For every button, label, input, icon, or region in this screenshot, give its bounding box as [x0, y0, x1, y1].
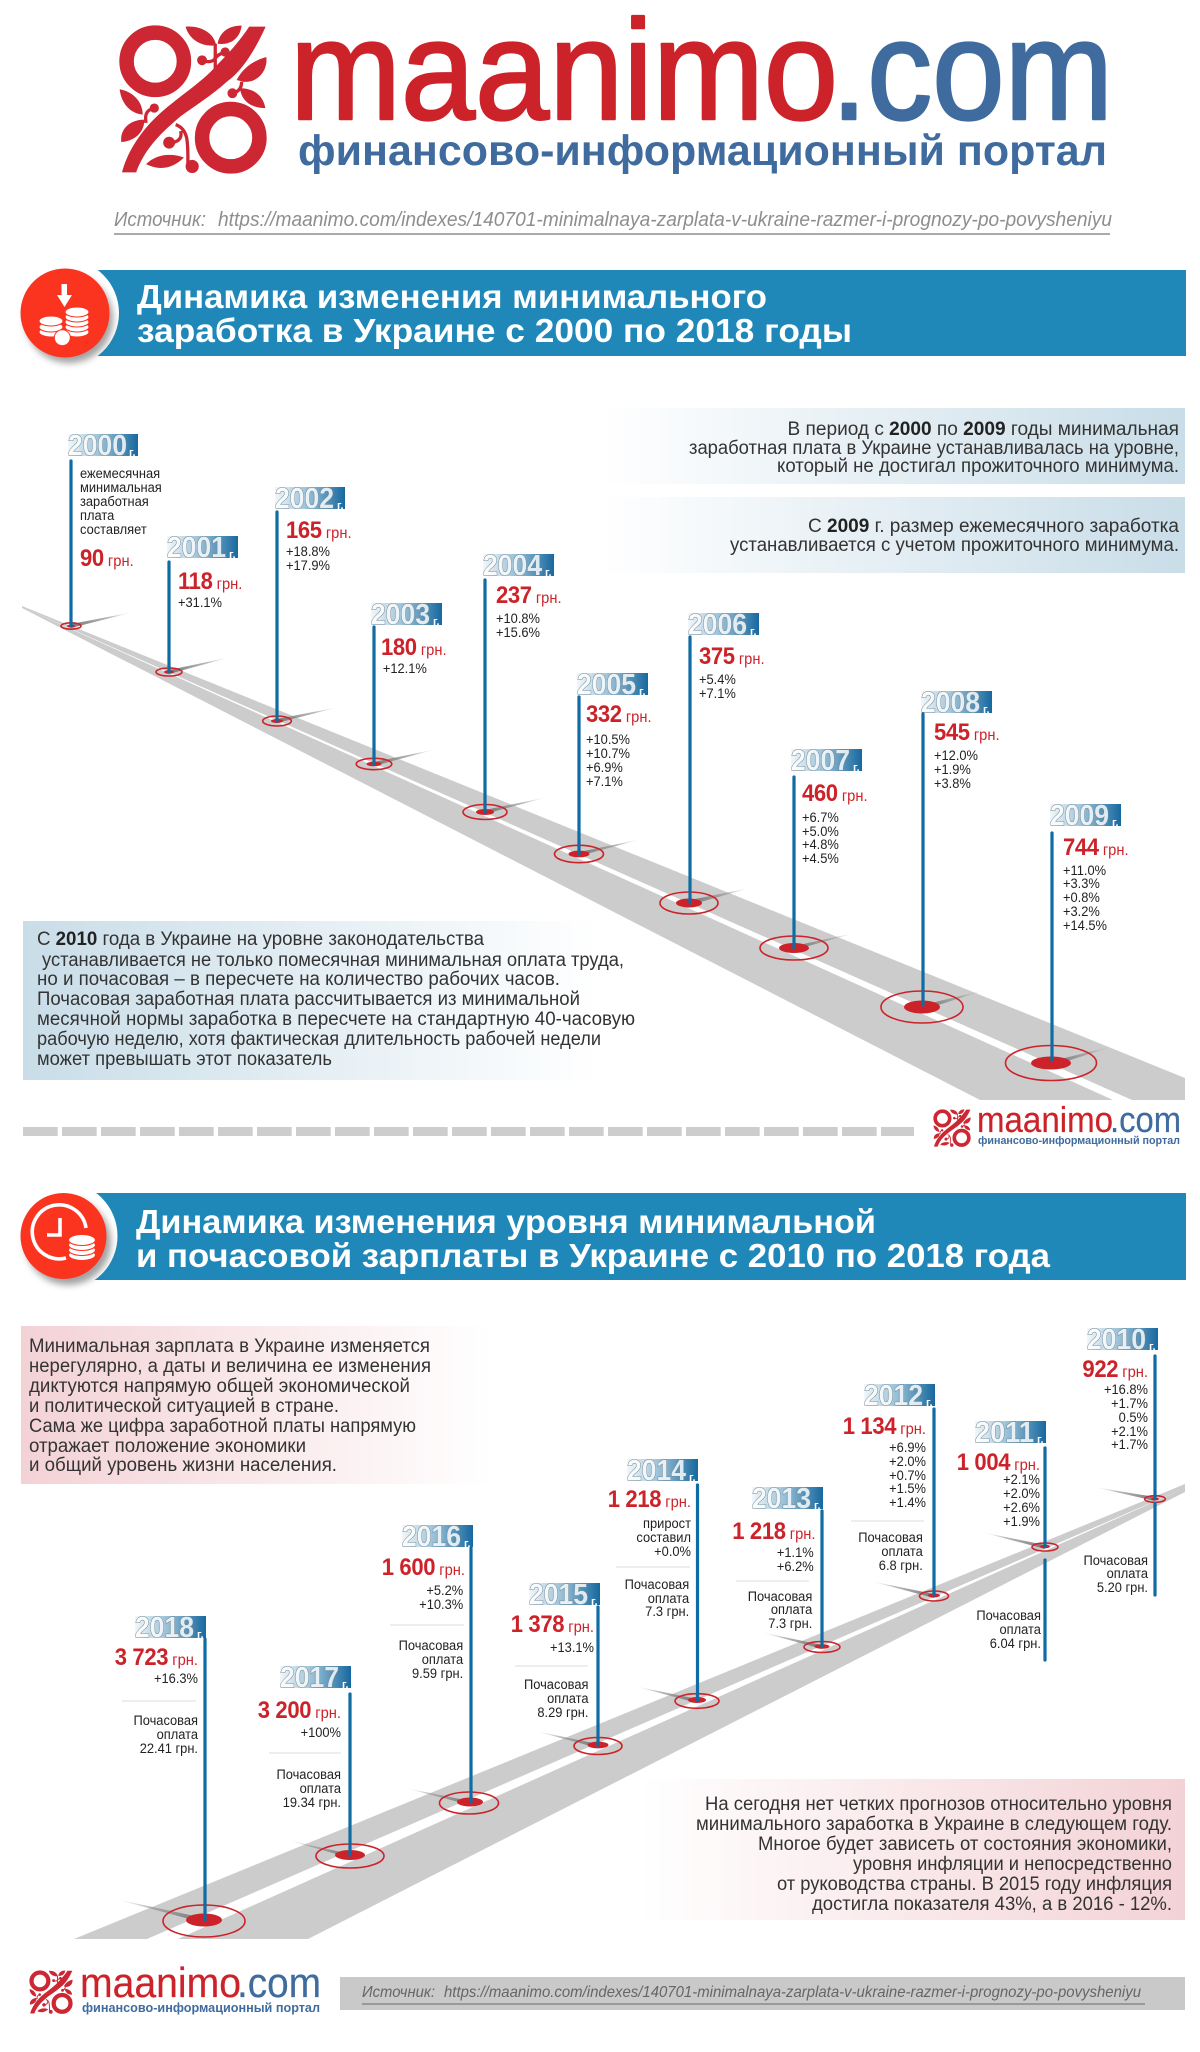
milestone 2018: +16.3%: [154, 1671, 198, 1686]
milestone 2008: 2008: [921, 687, 980, 719]
milestone 2017: оплата: [300, 1781, 341, 1796]
milestone 2013: оплата: [771, 1602, 813, 1617]
milestone 2007: 460 грн.: [802, 779, 868, 806]
source line: https://maanimo.com/indexes/140701-minimalnaya-zarplata-v-ukraine-razmer-i-prognozy-po-povysheniyu: [218, 209, 1112, 231]
milestone 2018: 3 723 грн.: [115, 1643, 198, 1670]
milestone 2016: 9.59 грн.: [412, 1666, 463, 1681]
milestone 2010: 5.20 грн.: [1097, 1580, 1148, 1595]
milestone 2015: 8.29 грн.: [537, 1705, 588, 1720]
milestone 2016: г.: [464, 1538, 471, 1550]
logo emblem: [120, 26, 267, 173]
milestone 2014: 2014: [627, 1455, 686, 1487]
milestone 2011: +1.9%: [1003, 1514, 1040, 1529]
milestone 2011: Почасовая: [976, 1608, 1041, 1623]
milestone 2014: +0.0%: [654, 1544, 691, 1559]
icon: coins with down arrow: [39, 284, 89, 346]
milestone 2017: +100%: [301, 1725, 341, 1740]
milestone 2003: г.: [433, 616, 440, 628]
milestone 2004: г.: [545, 567, 552, 579]
milestone 2010: +2.1%: [1111, 1424, 1148, 1439]
small logo right: [933, 1099, 1181, 1147]
milestone 2016: +5.2%: [426, 1583, 463, 1598]
milestone 2010: г.: [1149, 1341, 1156, 1353]
milestone 2004: 2004: [483, 550, 542, 582]
milestone 2000: плата: [80, 508, 115, 523]
milestone 2001: +31.1%: [178, 595, 222, 610]
milestone 2005: +7.1%: [586, 774, 623, 789]
milestone 2000: 2000: [68, 430, 127, 462]
milestone 2003: [356, 599, 447, 770]
callout: forecast: от руководства страны. В 2015 году инфляция: [777, 1874, 1172, 1895]
callout: since 2009: С 2009 г. размер ежемесячного заработка: [808, 516, 1179, 537]
milestone 2014: г.: [689, 1472, 696, 1484]
milestone 2012: [843, 1380, 948, 1601]
callout: since 2009: [600, 497, 1185, 573]
milestone 2012: +1.4%: [889, 1495, 926, 1510]
milestone 2008: +1.9%: [934, 762, 971, 777]
milestone 2012: +0.7%: [889, 1468, 926, 1483]
milestone 2002: 165 грн.: [286, 516, 352, 543]
milestone 2007: +5.0%: [802, 824, 839, 839]
milestone 2017: 19.34 грн.: [283, 1795, 341, 1810]
milestone 2001: [156, 532, 242, 676]
milestone 2000: [61, 430, 162, 629]
milestone 2007: г.: [853, 762, 860, 774]
milestone 2010: +16.8%: [1104, 1382, 1148, 1397]
heading text: заработка в Украине с 2000 по 2018 годы: [137, 312, 852, 349]
milestone 2005: [554, 669, 652, 863]
milestone 2010: оплата: [1107, 1566, 1148, 1581]
callout: forecast: уровня инфляции и непосредственно: [853, 1854, 1172, 1875]
milestone 2011: +2.1%: [1003, 1472, 1040, 1487]
callout: irregular changes: Сама же цифра заработной платы напрямую: [29, 1416, 416, 1437]
milestone 2015: +13.1%: [550, 1640, 594, 1655]
milestone 2014: прирост: [643, 1516, 691, 1531]
milestone 2000: 90 грн.: [80, 544, 134, 571]
milestone 2015: г.: [591, 1596, 598, 1608]
milestone 2013: 1 218 грн.: [732, 1517, 816, 1544]
milestone 2009: +3.3%: [1063, 876, 1100, 891]
milestone 2002: +18.8%: [286, 544, 330, 559]
milestone 2016: Почасовая: [399, 1638, 463, 1653]
milestone 2013: 2013: [752, 1483, 811, 1515]
milestone 2006: [660, 609, 765, 914]
milestone 2015: 1 378 грн.: [511, 1610, 594, 1637]
small logo left: [29, 1959, 321, 2015]
milestone 2011: +2.6%: [1003, 1500, 1040, 1515]
callout: forecast: На сегодня нет четких прогнозов относительно уровня: [705, 1794, 1172, 1815]
milestone 2016: +10.3%: [419, 1597, 463, 1612]
milestone 2008: +3.8%: [934, 776, 971, 791]
milestone 2015: Почасовая: [524, 1677, 588, 1692]
callout: 2010 hourly pay: [23, 921, 635, 1080]
milestone 2012: 2012: [864, 1380, 923, 1412]
road 2000-2009: [22, 606, 1185, 1100]
callout: irregular changes: диктуются напрямую общей экономической: [29, 1376, 410, 1397]
milestone 2007: +4.5%: [802, 851, 839, 866]
milestone 2010: [1082, 1324, 1165, 1595]
callout: 2010 hourly pay: но и почасовая – в пересчете на количество рабочих часов.: [37, 969, 560, 990]
milestone 2012: г.: [926, 1397, 933, 1409]
milestone 2009: +14.5%: [1063, 918, 1107, 933]
small logo left: .com: [237, 1959, 321, 2006]
milestone 2010: Почасовая: [1083, 1553, 1148, 1568]
small logo right: maanimo: [977, 1099, 1113, 1140]
callout: forecast: достигла показателя 43%, а в 2016 - 12%.: [812, 1894, 1172, 1915]
milestone 2009: +3.2%: [1063, 904, 1100, 919]
milestone 2001: 2001: [167, 532, 226, 564]
callout: 2000-2009: [600, 408, 1185, 484]
milestone 2015: [511, 1579, 622, 1754]
callout: forecast: [640, 1779, 1185, 1920]
milestone 2012: +2.0%: [889, 1454, 926, 1469]
road 2010-2018: [74, 1484, 1185, 1939]
milestone 2013: +6.2%: [777, 1559, 814, 1574]
icon: clock with coins: [32, 1205, 96, 1260]
milestone 2000: заработная: [80, 494, 149, 509]
milestone 2005: 332 грн.: [586, 700, 652, 727]
milestone 2013: [732, 1483, 840, 1652]
milestone 2014: составил: [636, 1530, 691, 1545]
milestone 2013: +1.1%: [777, 1545, 814, 1560]
milestone 2009: 2009: [1050, 800, 1109, 832]
milestone 2012: Почасовая: [858, 1530, 923, 1545]
milestone 2012: 6.8 грн.: [879, 1558, 923, 1573]
milestone 2011: 2011: [975, 1417, 1034, 1449]
milestone 2014: [608, 1455, 719, 1708]
milestone 2000: г.: [129, 447, 136, 459]
heading text: и почасовой зарплаты в Украине с 2010 по 2018 года: [136, 1237, 1051, 1274]
milestone 2002: 2002: [275, 483, 334, 515]
milestone 2008: [881, 687, 1000, 1023]
milestone 2006: 2006: [688, 609, 747, 641]
milestone 2001: 118 грн.: [178, 567, 242, 594]
milestone 2010: +1.7%: [1111, 1396, 1148, 1411]
milestone 2016: оплата: [422, 1652, 464, 1667]
milestone 2007: [760, 745, 868, 960]
milestone 2013: г.: [814, 1500, 821, 1512]
milestone 2009: г.: [1112, 817, 1119, 829]
milestone 2018: 2018: [135, 1612, 194, 1644]
milestone 2010: 922 грн.: [1082, 1355, 1148, 1382]
milestone 2016: 2016: [402, 1521, 461, 1553]
callout: forecast: Многое будет зависеть от состояния экономики,: [758, 1834, 1172, 1855]
milestone 2006: г.: [750, 626, 757, 638]
source line: Источник:: [114, 209, 206, 231]
milestone 2007: +4.8%: [802, 837, 839, 852]
milestone 2018: 22.41 грн.: [140, 1741, 198, 1756]
callout: irregular changes: Минимальная зарплата в Украине изменяется: [29, 1336, 430, 1357]
milestone 2015: 2015: [529, 1579, 588, 1611]
small logo right: финансово-информационный портал: [978, 1135, 1180, 1147]
milestone 2007: 2007: [791, 745, 850, 777]
milestone 2017: 3 200 грн.: [258, 1696, 341, 1723]
heading text: [136, 1203, 1051, 1274]
milestone 2006: 375 грн.: [699, 642, 765, 669]
milestone 2009: 744 грн.: [1063, 833, 1129, 860]
milestone 2004: +15.6%: [496, 625, 540, 640]
milestone 2010: 0.5%: [1119, 1410, 1148, 1425]
section 1 heading banner: [11, 259, 1186, 367]
heading text: [137, 278, 852, 349]
heading text: Динамика изменения минимального: [137, 278, 767, 315]
milestone 2011: +2.0%: [1003, 1486, 1040, 1501]
header logo: [120, 0, 1113, 175]
milestone 2018: [115, 1612, 245, 1937]
milestone 2004: [463, 550, 562, 820]
milestone 2004: 237 грн.: [496, 581, 562, 608]
small logo left: maanimo: [80, 1959, 241, 2006]
milestone 2008: 545 грн.: [934, 718, 1000, 745]
milestone 2002: [263, 483, 352, 726]
milestone 2018: г.: [197, 1629, 204, 1641]
milestone 2012: 1 134 грн.: [843, 1412, 926, 1439]
milestone 2018: оплата: [157, 1727, 198, 1742]
milestone 2003: 180 грн.: [381, 633, 447, 660]
milestone 2009: +11.0%: [1063, 863, 1106, 878]
milestone 2005: +10.7%: [586, 746, 630, 761]
milestone 2010: +1.7%: [1111, 1437, 1148, 1452]
milestone 2000: минимальная: [80, 480, 162, 495]
callout: 2000-2009: заработная плата в Украине устанавливалась на уровне,: [689, 438, 1179, 459]
milestone 2017: [258, 1662, 384, 1868]
milestone 2008: г.: [983, 704, 990, 716]
milestone 2011: оплата: [1000, 1622, 1041, 1637]
milestone 2014: 1 218 грн.: [608, 1485, 691, 1512]
milestone 2008: +12.0%: [934, 748, 978, 763]
callout: irregular changes: [21, 1326, 491, 1484]
callout: 2010 hourly pay: устанавливается не только помесячная минимальная оплата труда,: [42, 950, 624, 971]
milestone 2011: 6.04 грн.: [990, 1636, 1041, 1651]
source bar: Источник:: [362, 1984, 435, 2001]
milestone 2004: +10.8%: [496, 611, 540, 626]
milestone 2005: 2005: [577, 669, 636, 701]
milestone 2012: +1.5%: [889, 1481, 926, 1496]
milestone 2005: г.: [639, 686, 646, 698]
milestone 2011: 1 004 грн.: [957, 1448, 1040, 1475]
milestone 2011: [957, 1417, 1058, 1660]
source bar: https://maanimo.com/indexes/140701-minimalnaya-zarplata-v-ukraine-razmer-i-prognozy-po-povysheniyu: [444, 1984, 1141, 2001]
small logo right: .com: [1110, 1099, 1181, 1140]
section 2 heading banner: [10, 1182, 1186, 1290]
milestone 2014: оплата: [648, 1591, 690, 1606]
milestone 2002: г.: [337, 500, 344, 512]
milestone 2003: +12.1%: [383, 661, 427, 676]
milestone 2005: +10.5%: [586, 732, 630, 747]
milestone 2006: +5.4%: [699, 672, 736, 687]
callout: 2000-2009: В период с 2000 по 2009 годы минимальная: [788, 419, 1179, 440]
milestone 2016: [382, 1521, 498, 1814]
callout: 2010 hourly pay: рабочую неделю, хотя фактическая длительность рабочей недели: [37, 1029, 601, 1050]
milestone 2012: +6.9%: [889, 1440, 926, 1455]
milestone 2013: Почасовая: [748, 1589, 812, 1604]
milestone 2006: +7.1%: [699, 686, 736, 701]
callout: 2010 hourly pay: С 2010 года в Украине на уровне законодательства: [37, 929, 484, 950]
milestone 2013: 7.3 грн.: [768, 1616, 812, 1631]
milestone 2010: 2010: [1087, 1324, 1146, 1356]
callout: 2010 hourly pay: месячной нормы заработка в пересчете на стандартную 40-часовую: [37, 1009, 635, 1030]
milestone 2009: [1006, 800, 1129, 1080]
milestone 2017: 2017: [280, 1662, 339, 1694]
source bar: [340, 1977, 1185, 2010]
milestone 2011: г.: [1037, 1434, 1044, 1446]
milestone 2002: +17.9%: [286, 558, 330, 573]
logo tagline: финансово-информационный портал: [298, 127, 1107, 175]
callout: 2010 hourly pay: может превышать этот показатель: [37, 1049, 332, 1070]
callout: forecast: минимального заработка в Украине в следующем году.: [696, 1814, 1172, 1835]
callout: irregular changes: отражает положение экономики: [29, 1436, 306, 1457]
callout: 2000-2009: который не достигал прожиточного минимума.: [777, 456, 1179, 477]
milestone 2017: Почасовая: [276, 1767, 341, 1782]
milestone 2018: Почасовая: [133, 1713, 198, 1728]
milestone 2005: +6.9%: [586, 760, 623, 775]
heading text: Динамика изменения уровня минимальной: [136, 1203, 876, 1240]
callout: 2010 hourly pay: Почасовая заработная плата рассчитывается из минимальной: [37, 989, 580, 1010]
milestone 2014: 7.3 грн.: [645, 1604, 689, 1619]
milestone 2000: ежемесячная: [80, 466, 160, 481]
callout: irregular changes: и политической ситуацией в стране.: [29, 1396, 339, 1417]
milestone 2015: оплата: [547, 1691, 589, 1706]
callout: since 2009: устанавливается с учетом прожиточного минимума.: [730, 535, 1179, 556]
milestone 2017: г.: [342, 1679, 349, 1691]
milestone 2012: оплата: [881, 1544, 923, 1559]
milestone 2016: 1 600 грн.: [382, 1553, 465, 1580]
callout: irregular changes: и общий уровень жизни населения.: [29, 1455, 337, 1476]
small logo left: финансово-информационный портал: [82, 2000, 320, 2015]
milestone 2000: составляет: [80, 522, 147, 537]
milestone 2001: г.: [229, 549, 236, 561]
milestone 2003: 2003: [371, 599, 430, 631]
milestone 2007: +6.7%: [802, 810, 839, 825]
callout: irregular changes: нерегулярно, а даты и величина ее изменения: [29, 1356, 431, 1377]
milestone 2009: +0.8%: [1063, 890, 1100, 905]
milestone 2014: Почасовая: [625, 1577, 689, 1592]
